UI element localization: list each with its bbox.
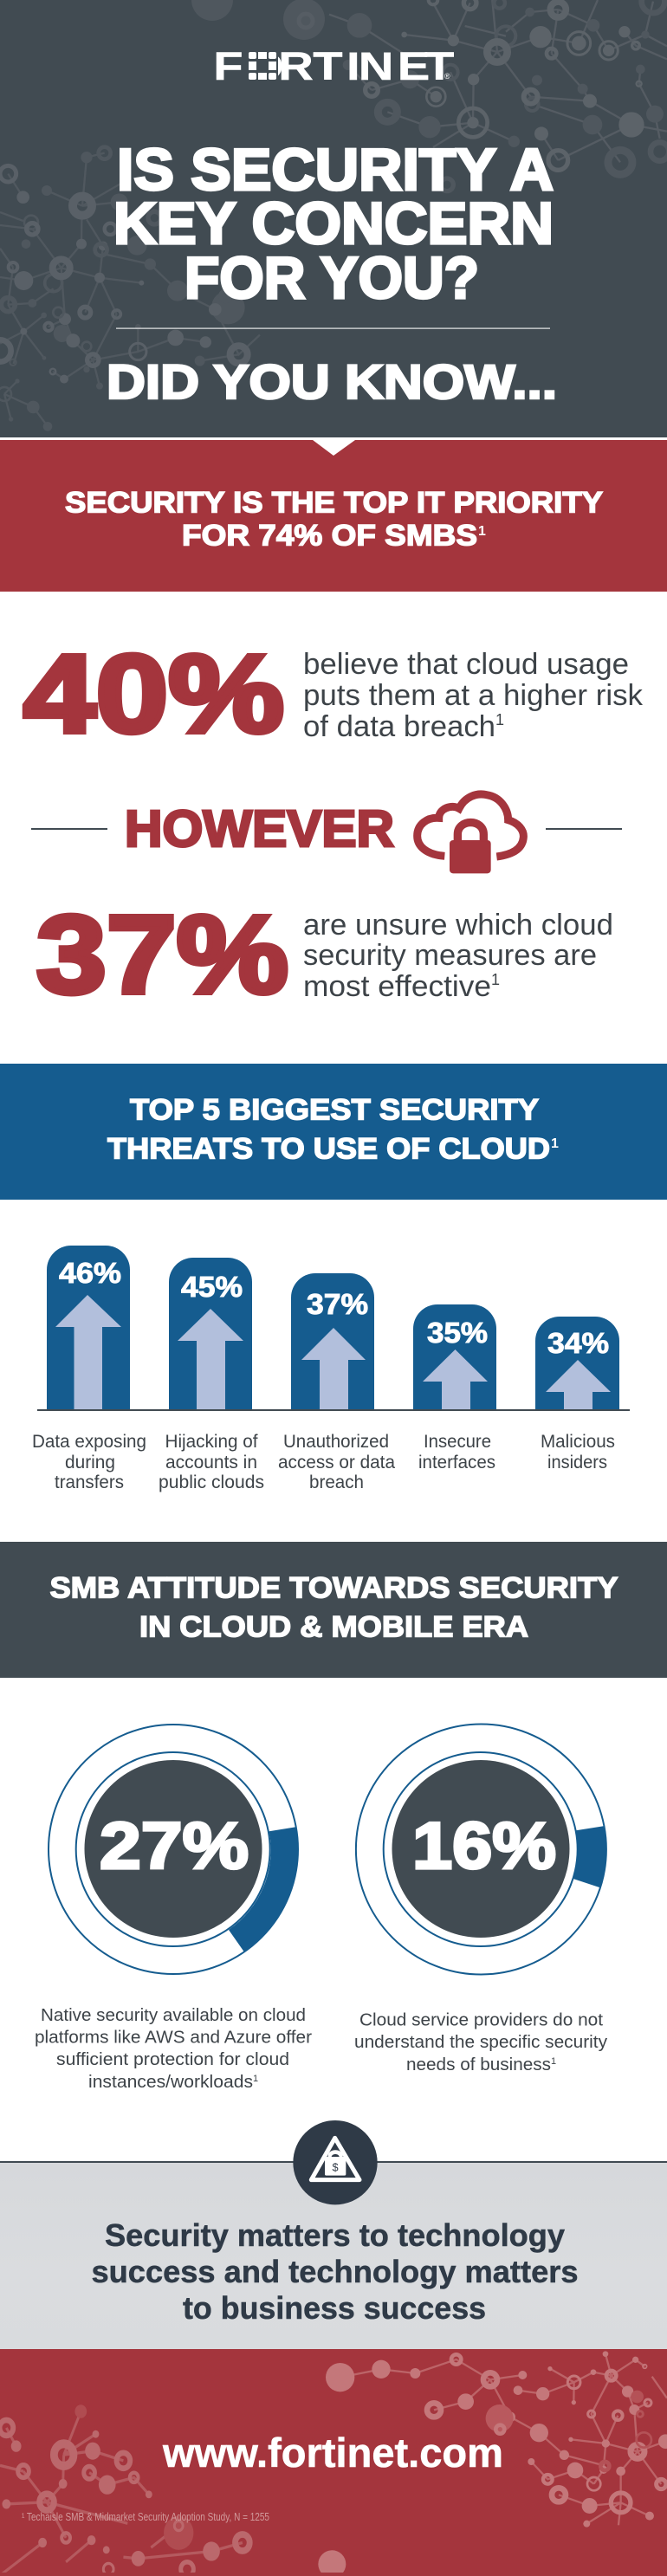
bar labels: Insecure	[424, 1432, 491, 1452]
icon: shield triangle with padlock: $	[332, 2162, 339, 2174]
stat text	[303, 648, 644, 743]
bar labels	[32, 1432, 615, 1492]
bar labels: during	[65, 1453, 115, 1472]
however divider: HOWEVER	[125, 800, 394, 858]
caption: 16%: 1	[551, 2056, 556, 2067]
conclusion text	[92, 2217, 579, 2326]
stat: 40%: 40%	[23, 632, 284, 756]
donut chart: 16%: 16%	[412, 1809, 556, 1883]
caption: 27%: 1	[253, 2074, 258, 2084]
stat text	[303, 909, 613, 1003]
bar: 45%: 45%	[181, 1271, 243, 1303]
panel: blue threats banner: 1	[551, 1136, 559, 1151]
bar labels: Data exposing	[32, 1432, 146, 1452]
however divider	[31, 794, 622, 873]
website url: www.fortinet.com	[162, 2430, 503, 2476]
decorative network: footer	[0, 2351, 667, 2576]
bar: 37%	[291, 1273, 374, 1410]
panel: blue threats banner	[0, 1064, 667, 1200]
stat text: are unsure which cloud	[303, 909, 613, 942]
bar: 34%	[535, 1317, 619, 1410]
bar: 46%	[47, 1246, 130, 1410]
stat: 37%: 37%	[36, 893, 288, 1017]
title: IS SECURITY A	[117, 137, 554, 203]
caption: 16%: understand the specific security	[354, 2033, 607, 2052]
bar labels: transfers	[55, 1472, 124, 1492]
logo: Fortinet: FORTINET	[213, 44, 454, 88]
caption: 27%: platforms like AWS and Azure offer	[35, 2029, 312, 2048]
panel: red priority banner	[0, 440, 667, 592]
bar: 35%	[413, 1304, 496, 1410]
caption: 16%: Cloud service providers do not	[359, 2011, 603, 2030]
bar chart: top 5 threats	[37, 1246, 630, 1411]
icon: cloud with padlock	[418, 794, 523, 873]
conclusion text: to business success	[183, 2290, 486, 2326]
banner heading: FOR 74% OF SMBS	[182, 520, 477, 553]
bar labels: breach	[309, 1472, 364, 1492]
logo: Fortinet: ®	[444, 72, 450, 81]
stat: 40%	[23, 632, 644, 756]
conclusion text: success and technology matters	[92, 2254, 579, 2289]
caption: 27%	[35, 2006, 312, 2092]
panel: blue threats banner: TOP 5 BIGGEST SECURITY	[130, 1093, 539, 1126]
stat text: 1	[491, 971, 500, 988]
bar labels: insiders	[547, 1453, 607, 1472]
bar: 45%	[169, 1258, 252, 1410]
pointer triangle	[313, 440, 355, 456]
stat text: puts them at a higher risk	[303, 679, 644, 712]
stat text: 1	[495, 711, 504, 728]
panel: dark attitude banner	[0, 1542, 667, 1678]
banner heading	[65, 487, 603, 553]
title: FOR YOU?	[185, 245, 479, 311]
caption: 16%: needs of business	[406, 2055, 551, 2074]
bar: 35%: 35%	[427, 1317, 488, 1349]
banner heading: 1	[478, 524, 486, 539]
divider rule	[116, 327, 550, 329]
bar labels: interfaces	[418, 1453, 495, 1472]
footnote: ¹ Techaisle SMB & Midmarket Security Adoption Study, N = 1255	[22, 2510, 269, 2523]
stat text: most effective	[303, 970, 491, 1003]
donut chart: 27%: 27%	[100, 1809, 249, 1883]
conclusion text: Security matters to technology	[105, 2217, 565, 2253]
stat text: believe that cloud usage	[303, 648, 629, 681]
bar labels: access or data	[278, 1453, 395, 1472]
caption: 16%	[354, 2011, 607, 2074]
panel: grey conclusion	[0, 2120, 667, 2349]
stat: 37%	[36, 893, 613, 1017]
banner heading: SECURITY IS THE TOP IT PRIORITY	[65, 487, 603, 520]
bar labels: Unauthorized	[283, 1432, 389, 1452]
icon: shield triangle with padlock	[293, 2120, 378, 2204]
bar labels: accounts in	[165, 1453, 257, 1472]
title	[113, 137, 554, 311]
bar: 37%: 37%	[307, 1288, 368, 1320]
bar: 34%: 34%	[547, 1327, 609, 1359]
bar labels: public clouds	[159, 1472, 264, 1492]
stat text: security measures are	[303, 939, 597, 972]
title: KEY CONCERN	[113, 191, 554, 256]
donut chart: 16%	[356, 1724, 606, 1975]
bar labels: Malicious	[541, 1432, 615, 1452]
panel: dark attitude banner: SMB ATTITUDE TOWARDS SECURITY	[50, 1571, 618, 1604]
stat text: of data breach	[303, 710, 495, 743]
caption: 27%: instances/workloads	[88, 2073, 253, 2092]
panel: red footer	[0, 2349, 667, 2576]
caption: 27%: Native security available on cloud	[41, 2006, 306, 2025]
subtitle: did you know: DID YOU KNOW...	[107, 354, 557, 409]
panel: blue threats banner: THREATS TO USE OF CLOUD	[107, 1133, 550, 1166]
bar: 46%: 46%	[59, 1257, 121, 1289]
donut chart: 27%	[49, 1725, 298, 1974]
panel: dark attitude banner: IN CLOUD & MOBILE ERA	[139, 1611, 528, 1644]
bar labels: Hijacking of	[165, 1432, 258, 1452]
caption: 27%: sufficient protection for cloud	[56, 2050, 289, 2069]
decorative network: header	[0, 0, 667, 431]
